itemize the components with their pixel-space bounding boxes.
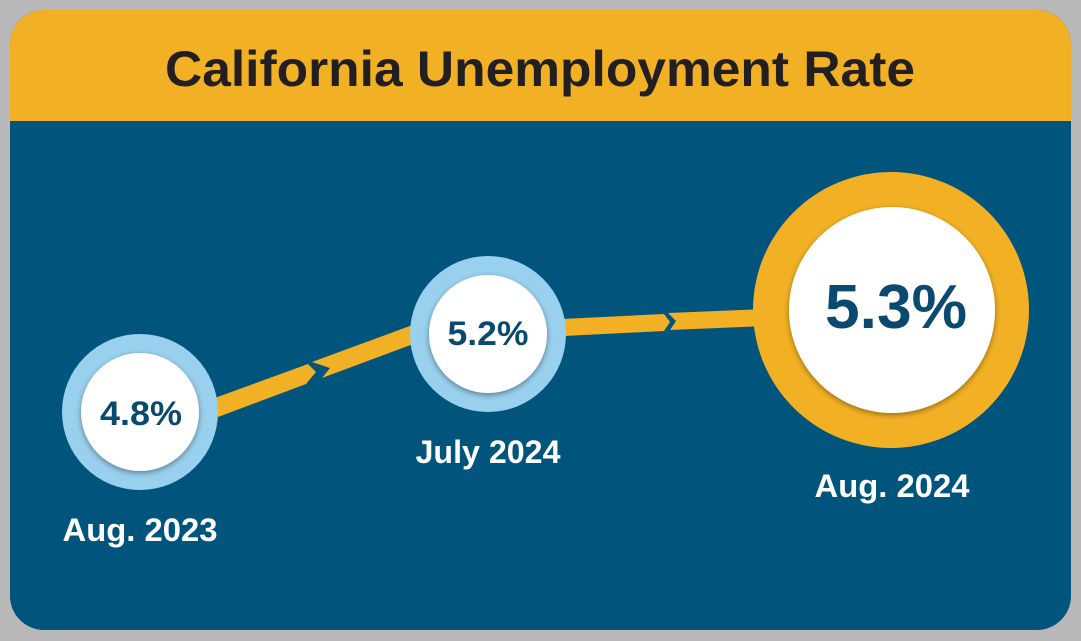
label: Aug. 2023: Aug. 2023	[62, 512, 218, 548]
arrow: right connector	[562, 309, 766, 336]
label: Aug. 2024: Aug. 2024	[814, 468, 970, 504]
circle: July 2024: 5.2%	[448, 315, 528, 353]
circle: Aug 2023: 4.8%	[100, 395, 182, 433]
header bar	[10, 10, 1071, 121]
circle: Aug 2024	[753, 172, 1029, 448]
circle: July 2024	[410, 256, 566, 412]
circle: Aug 2023	[62, 334, 218, 490]
title: California Unemployment Rate	[165, 41, 915, 97]
label: July 2024: July 2024	[416, 434, 561, 470]
arrow: left connector	[212, 323, 424, 417]
circle: Aug 2024: 5.3%	[825, 273, 967, 342]
